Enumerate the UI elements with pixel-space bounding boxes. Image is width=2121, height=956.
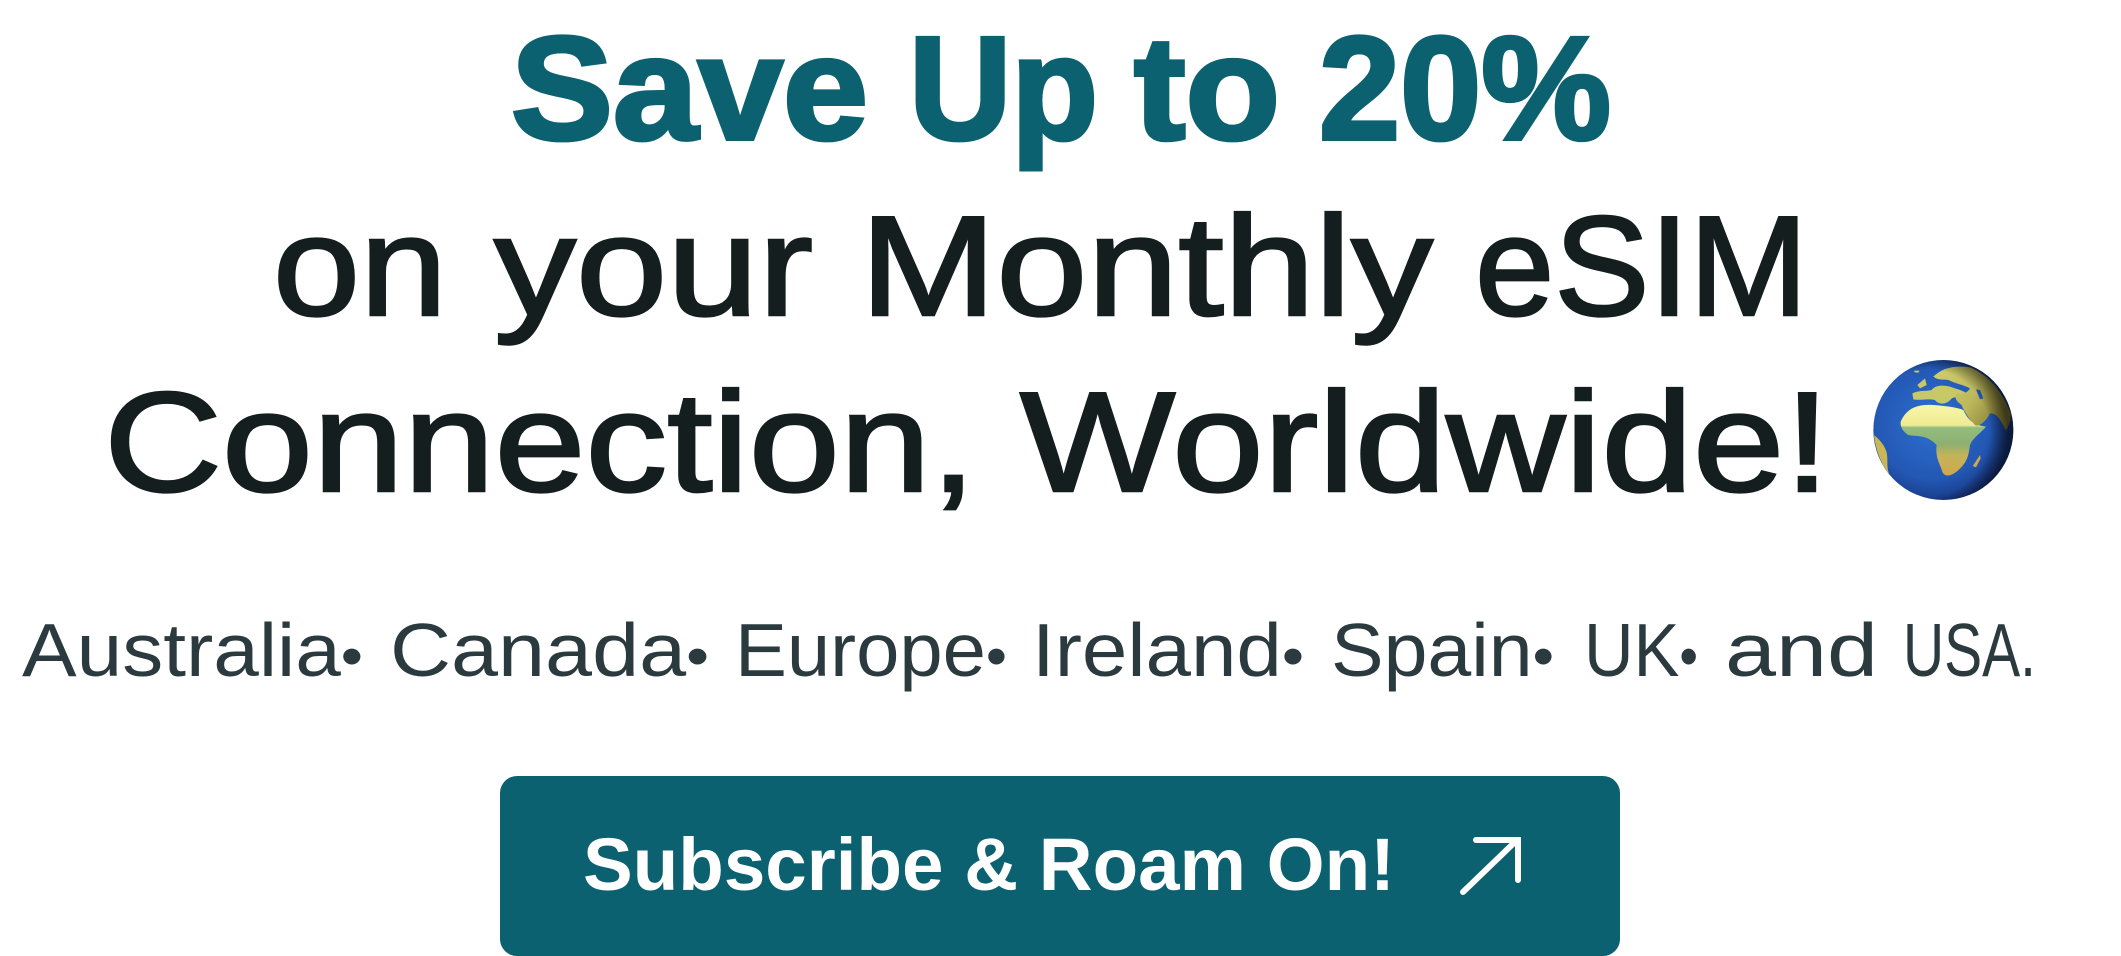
headline line 2: on your Monthly eSIM: eSIM <box>1475 187 1808 346</box>
country list: Spain• <box>1331 608 1554 692</box>
headline line 1: Save Up to 20%: Up <box>909 7 1098 171</box>
country list: USA. <box>1903 608 2036 692</box>
country list: Ireland • <box>1032 608 1304 692</box>
headline <box>104 7 1830 522</box>
country list: and <box>1725 608 1878 692</box>
country list <box>22 608 2036 692</box>
headline line 2: on your Monthly eSIM: on <box>273 187 447 346</box>
icon: arrow up-right <box>1463 840 1518 892</box>
country list: Australia • <box>22 608 363 692</box>
headline line 1: Save Up to 20%: 20% <box>1319 7 1611 171</box>
country list: UK• <box>1584 608 1698 692</box>
headline line 1: Save Up to 20%: to <box>1134 7 1280 171</box>
country list: Canada • <box>390 608 709 692</box>
headline line 3: Connection, Worldwide! <box>104 363 1830 522</box>
headline line 2: on your Monthly eSIM: Monthly <box>860 187 1433 346</box>
headline line 3: Connection, Worldwide!: Worldwide! <box>1020 363 1830 522</box>
button label: Subscribe & Roam On! <box>583 823 1395 906</box>
headline line 2: on your Monthly eSIM: your <box>494 187 813 346</box>
country list: Europe• <box>735 608 1007 692</box>
headline line 2: on your Monthly eSIM <box>273 187 1808 346</box>
icon: globe <box>1873 360 2013 500</box>
headline line 3: Connection, Worldwide!: Connection, <box>104 363 976 522</box>
headline line 1: Save Up to 20% <box>511 7 1611 171</box>
headline line 1: Save Up to 20%: Save <box>511 7 868 171</box>
button: Subscribe & Roam On! <box>500 776 1620 956</box>
